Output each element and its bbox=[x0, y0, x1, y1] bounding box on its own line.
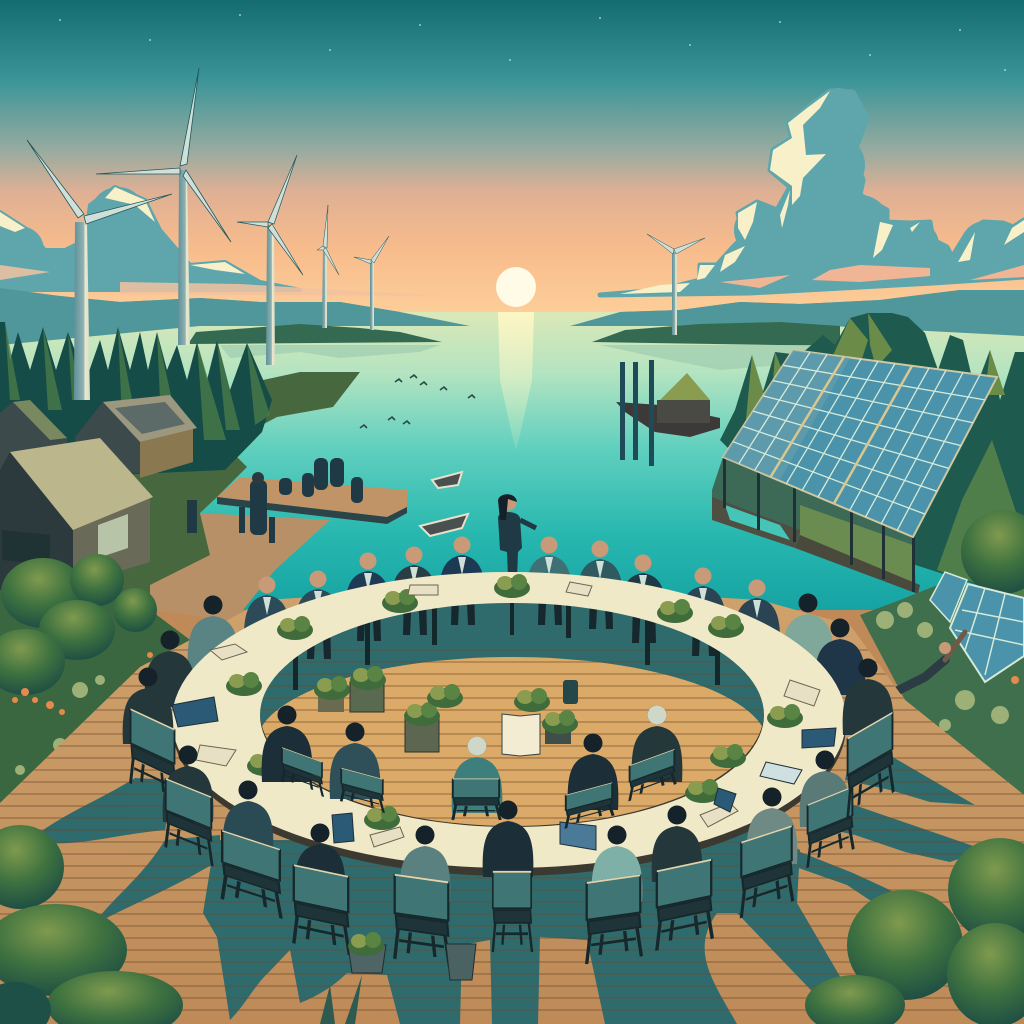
boats bbox=[420, 472, 468, 536]
right shore shrubs bbox=[860, 580, 1024, 795]
front cabin bbox=[0, 438, 153, 590]
front ring people and chairs bbox=[123, 658, 893, 967]
stars bbox=[59, 14, 1006, 71]
table edge bbox=[172, 576, 846, 876]
mountain band left of lake bbox=[0, 290, 1024, 345]
side people behind table bbox=[145, 594, 865, 707]
circular table top bbox=[172, 572, 846, 868]
island reflections bbox=[220, 345, 830, 370]
floor items: planter and bucket bbox=[348, 932, 476, 980]
wooden deck bbox=[0, 585, 1024, 1024]
middle cabin bbox=[75, 395, 197, 478]
wind turbine 6 bbox=[647, 234, 705, 335]
back cabin bbox=[0, 400, 67, 470]
sun reflection bbox=[498, 312, 534, 450]
large solar array bbox=[723, 350, 997, 537]
wind turbine 5 bbox=[354, 236, 389, 330]
dock bbox=[217, 477, 407, 524]
back row of people bbox=[244, 536, 780, 668]
foreground reeds bbox=[320, 975, 362, 1024]
long shadows on deck bbox=[30, 735, 985, 1024]
right forest bbox=[720, 313, 1024, 600]
small solar panels bbox=[930, 572, 1024, 682]
far islands bbox=[188, 322, 840, 346]
shaded floor beneath the ring bbox=[252, 597, 772, 833]
standing speaker bbox=[498, 494, 536, 578]
sky bbox=[0, 0, 1024, 320]
boardwalk bbox=[150, 513, 330, 620]
table plants and papers bbox=[172, 574, 836, 850]
grass shoreline left bbox=[0, 372, 360, 803]
solar building under structure bbox=[712, 457, 920, 594]
wind turbine 2 bbox=[96, 68, 231, 345]
sun bbox=[496, 267, 536, 307]
wind turbine 4 bbox=[317, 205, 339, 328]
wind turbine 3 bbox=[237, 155, 303, 365]
shore flowers right bbox=[876, 602, 1019, 731]
birds bbox=[360, 375, 475, 428]
right large trees bbox=[937, 440, 1024, 600]
left shrubs bbox=[0, 554, 190, 803]
inner ring people bbox=[262, 706, 682, 828]
center planters and open book bbox=[314, 666, 746, 768]
cloud: right bbox=[600, 88, 1024, 295]
reclining figure by the solar panels bbox=[895, 632, 965, 692]
floating platform with pilings bbox=[616, 360, 720, 466]
distant mountains bbox=[0, 288, 1024, 350]
lake bbox=[0, 312, 1024, 610]
bushes: bottom-left bbox=[0, 825, 183, 1024]
sunlit inner floor bbox=[256, 657, 768, 833]
table legs bbox=[293, 600, 720, 690]
deck plank lines bbox=[0, 650, 1024, 1010]
people on dock and boardwalk bbox=[187, 458, 363, 543]
bushes: bottom-right bbox=[805, 838, 1024, 1024]
wind turbine 1 bbox=[27, 140, 172, 400]
left forest bbox=[0, 322, 272, 480]
cloud: left bbox=[0, 187, 440, 296]
